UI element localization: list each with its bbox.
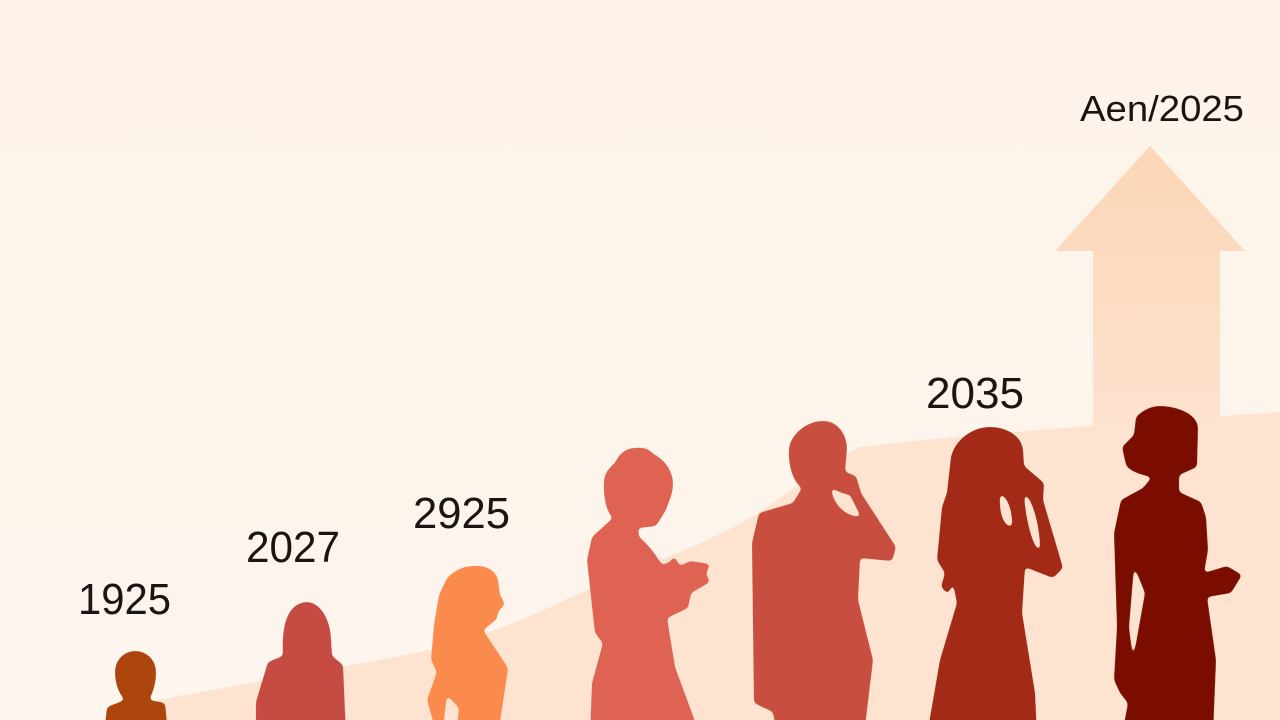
figure final <box>1114 406 1242 720</box>
figure 1925 <box>78 575 171 720</box>
figure fifth <box>752 421 896 720</box>
label 1925: 1925 <box>78 575 171 624</box>
label 2027: 2027 <box>246 523 340 572</box>
silhouette 2027 <box>256 602 346 720</box>
figure 2027 <box>246 523 346 720</box>
silhouette final <box>1114 406 1242 720</box>
silhouette fifth <box>752 421 896 720</box>
arrow label: Aen/2025 <box>1080 88 1244 129</box>
silhouette 1925 <box>104 651 168 720</box>
figure 2925 <box>413 489 510 720</box>
silhouette 2925 <box>427 566 508 720</box>
label 2035: 2035 <box>926 369 1024 418</box>
silhouette fourth <box>587 448 710 720</box>
figure fourth <box>587 448 710 720</box>
label 2925: 2925 <box>413 489 510 538</box>
figure 2035 <box>926 369 1063 720</box>
arrow <box>1055 146 1245 425</box>
growth area band <box>150 412 1280 720</box>
silhouette 2035 <box>927 427 1063 720</box>
